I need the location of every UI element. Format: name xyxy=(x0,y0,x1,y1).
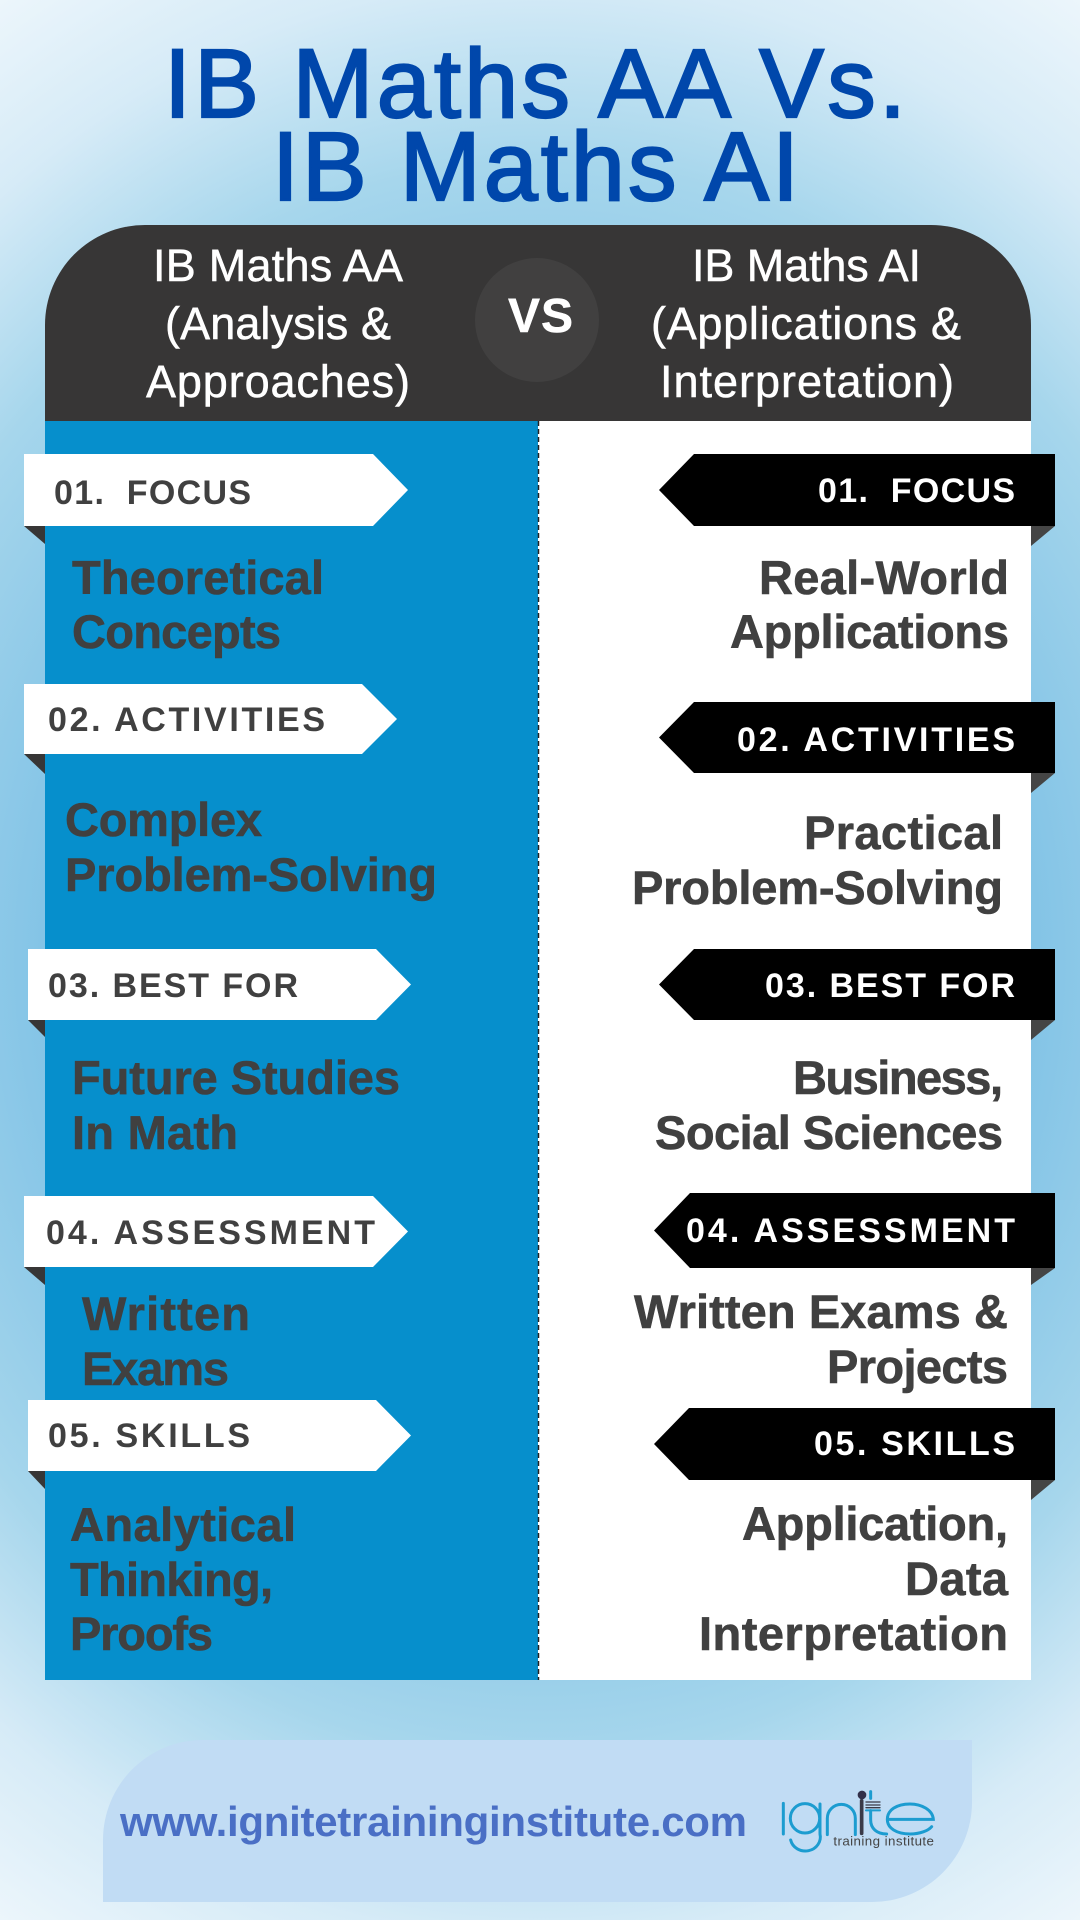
item: AA assessment: Written xyxy=(82,1287,250,1340)
item: AA best for xyxy=(28,949,411,1159)
heading: AA column: Approaches) xyxy=(146,356,410,407)
item: AA assessment xyxy=(24,1196,408,1395)
item: AA activities: 02. ACTIVITIES xyxy=(48,701,325,739)
item: AI focus: Applications xyxy=(730,605,1009,658)
item: AI skills: Application, xyxy=(742,1497,1008,1550)
item: AA activities: Complex xyxy=(65,793,262,846)
item: AI best for: Business, xyxy=(793,1051,1003,1104)
item: AA best for: 03. BEST FOR xyxy=(48,967,298,1005)
item: AI focus xyxy=(659,454,1055,658)
item: AA activities: Problem-Solving xyxy=(65,848,437,901)
item: AA skills: Analytical xyxy=(70,1498,296,1551)
item: AI skills: 05. SKILLS xyxy=(814,1425,1015,1463)
heading: AA column: IB Maths AA xyxy=(153,240,403,291)
item: AA focus: Theoretical xyxy=(72,551,324,604)
panel: footer xyxy=(103,1740,972,1902)
item: AI activities xyxy=(632,702,1055,914)
item: AI focus: Real-World xyxy=(759,551,1009,604)
item: AI best for xyxy=(655,949,1055,1159)
item: AA skills: Proofs xyxy=(70,1607,213,1660)
item: AA skills xyxy=(28,1400,411,1660)
icon: Ignite logo: training institute xyxy=(833,1833,934,1848)
item: AI activities: Practical xyxy=(804,806,1003,859)
item: AA focus: 01. FOCUS xyxy=(54,474,251,512)
item: AI skills: Data xyxy=(905,1552,1009,1605)
item: AI activities: 02. ACTIVITIES xyxy=(737,721,1015,759)
item: AA best for: In Math xyxy=(72,1106,238,1159)
icon: VS badge: VS xyxy=(508,290,573,343)
item: AI best for: 03. BEST FOR xyxy=(765,967,1015,1005)
item: AI activities: Problem-Solving xyxy=(632,861,1003,914)
title: IB Maths AI xyxy=(272,112,799,221)
heading: AI column: Interpretation) xyxy=(660,356,954,407)
panel: AA column xyxy=(24,421,538,1680)
text: website: www.ignitetraininginstitute.com xyxy=(119,1798,747,1845)
item: AI skills: Interpretation xyxy=(699,1607,1008,1660)
item: AI assessment: 04. ASSESSMENT xyxy=(686,1212,1015,1250)
item: AI skills xyxy=(654,1408,1055,1660)
panel: AI column xyxy=(538,421,1055,1680)
title: IB Maths AA Vs. xyxy=(164,29,906,138)
item: AA activities xyxy=(24,684,437,901)
title xyxy=(164,29,906,221)
panel: header bar xyxy=(45,225,1031,421)
item: AA best for: Future Studies xyxy=(72,1051,400,1104)
item: AA assessment: Exams xyxy=(82,1342,229,1395)
icon: VS badge xyxy=(475,258,599,382)
heading: AI column: (Applications & xyxy=(651,298,961,349)
item: AI focus: 01. FOCUS xyxy=(818,472,1015,510)
icon: Ignite logo xyxy=(783,1791,934,1851)
item: AI assessment xyxy=(634,1193,1055,1393)
item: AA focus xyxy=(24,454,408,658)
item: AA skills: 05. SKILLS xyxy=(48,1417,250,1455)
heading: AA column xyxy=(146,240,410,407)
heading: AA column: (Analysis & xyxy=(165,298,391,349)
item: AI assessment: Projects xyxy=(827,1340,1008,1393)
item: AI best for: Social Sciences xyxy=(655,1106,1003,1159)
item: AA assessment: 04. ASSESSMENT xyxy=(46,1214,375,1252)
item: AA focus: Concepts xyxy=(72,605,281,658)
heading: AI column: IB Maths AI xyxy=(692,240,921,291)
item: AA skills: Thinking, xyxy=(70,1553,273,1606)
heading: AI column xyxy=(651,240,961,407)
item: AI assessment: Written Exams & xyxy=(634,1285,1008,1338)
